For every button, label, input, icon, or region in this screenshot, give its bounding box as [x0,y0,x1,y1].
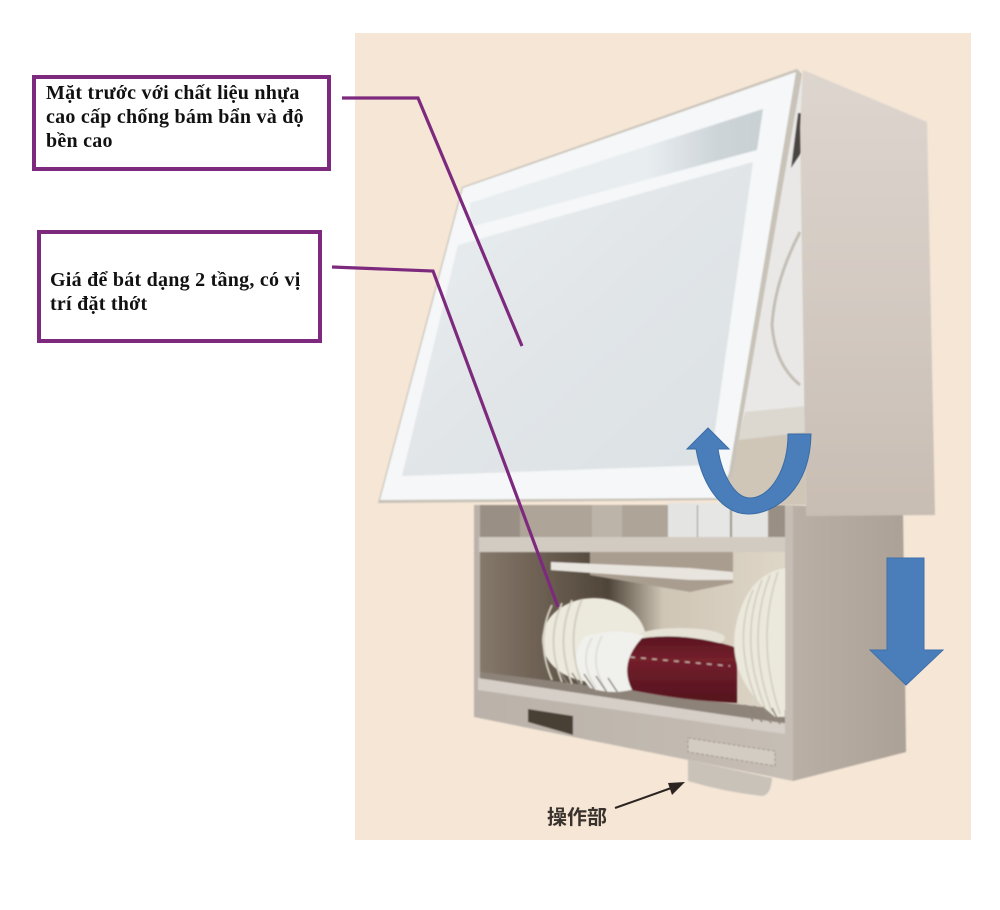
leader line: front panel [342,98,522,346]
wire rack tines [560,672,780,724]
leader line: dish rack [332,267,558,607]
plate stack right [734,568,785,717]
blue down arrow [870,558,943,685]
handle notch [528,709,573,735]
bottom wire rack [480,672,785,723]
white bowls behind [635,628,725,648]
lower compartment [480,552,785,723]
plate stack left [542,598,646,684]
control unit [688,760,772,796]
callout: dish rack: Giá để bát dạng 2 tầng, có vị [50,269,301,291]
side panel of upper cabinet [800,70,935,516]
upper compartment [480,503,785,540]
drying arm [551,552,733,592]
callout: front panel [32,75,331,171]
front door [378,69,802,503]
callout: front panel: Mặt trước với chất liệu nhựa [46,82,300,104]
callout: front panel: cao cấp chống bám bẩn và độ [46,106,304,128]
callout: dish rack: trí đặt thớt [50,293,147,315]
shelf bar [479,537,785,552]
button label strip [688,738,775,766]
upper cabinet interior [722,80,808,505]
background panel [355,33,971,840]
lower cabinet body [474,503,906,796]
blue curved arrow [687,428,811,514]
black pointer arrow [615,782,685,808]
cabinet front frame [474,505,793,781]
stacks of plates [542,568,785,724]
callout: dish rack [37,230,322,343]
main frosted pane [402,162,753,476]
label: control unit: 操作部 [547,806,607,829]
front lip highlight [478,678,785,734]
white bowl stack [576,632,644,692]
door outer frame [378,69,802,503]
upper frosted pane [470,109,763,227]
callout: front panel: bền cao [46,130,113,152]
cabinet side wall [785,505,906,781]
burgundy bowl stack [625,636,737,703]
